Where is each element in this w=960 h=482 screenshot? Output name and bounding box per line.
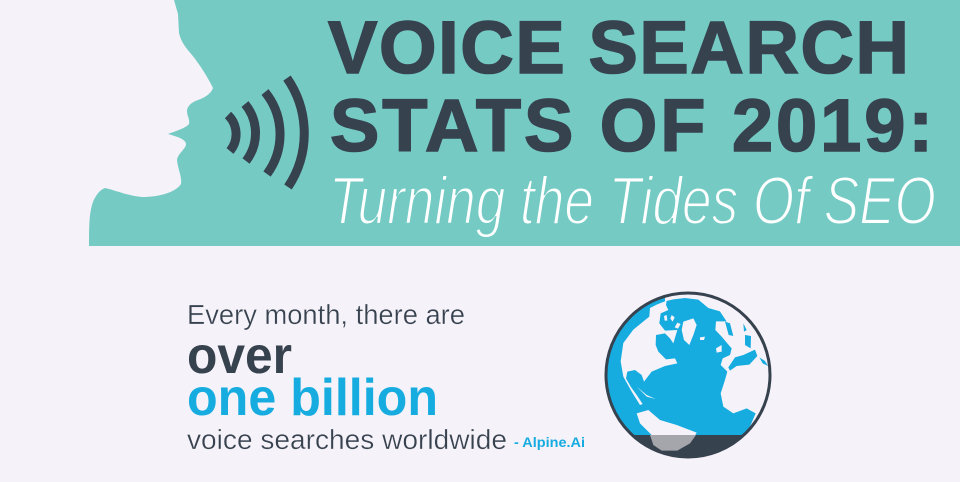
header panel with face silhouette [89, 0, 960, 246]
statistic text block: one billion [187, 369, 438, 427]
dark band [634, 435, 742, 456]
north america [621, 301, 677, 405]
title: VOICE SEARCH [328, 6, 909, 89]
seas [725, 322, 768, 371]
grey land shadow [650, 435, 696, 451]
arctic islands [664, 315, 681, 329]
arctic cap [665, 294, 738, 322]
title [328, 6, 936, 239]
statistic text block: voice searches worldwide [187, 424, 507, 455]
greenland [682, 318, 697, 345]
icon: globe [604, 292, 772, 458]
statistic text block: - Alpine.Ai [514, 434, 585, 450]
icon: sound waves [228, 78, 304, 187]
south america [636, 410, 697, 435]
title: STATS OF 2019: [330, 84, 933, 167]
statistic text block: Every month, there are [187, 299, 465, 330]
statistic text block: over [187, 327, 292, 385]
small islands [637, 337, 722, 399]
statistic text block [187, 299, 585, 455]
europe and africa [715, 312, 768, 426]
